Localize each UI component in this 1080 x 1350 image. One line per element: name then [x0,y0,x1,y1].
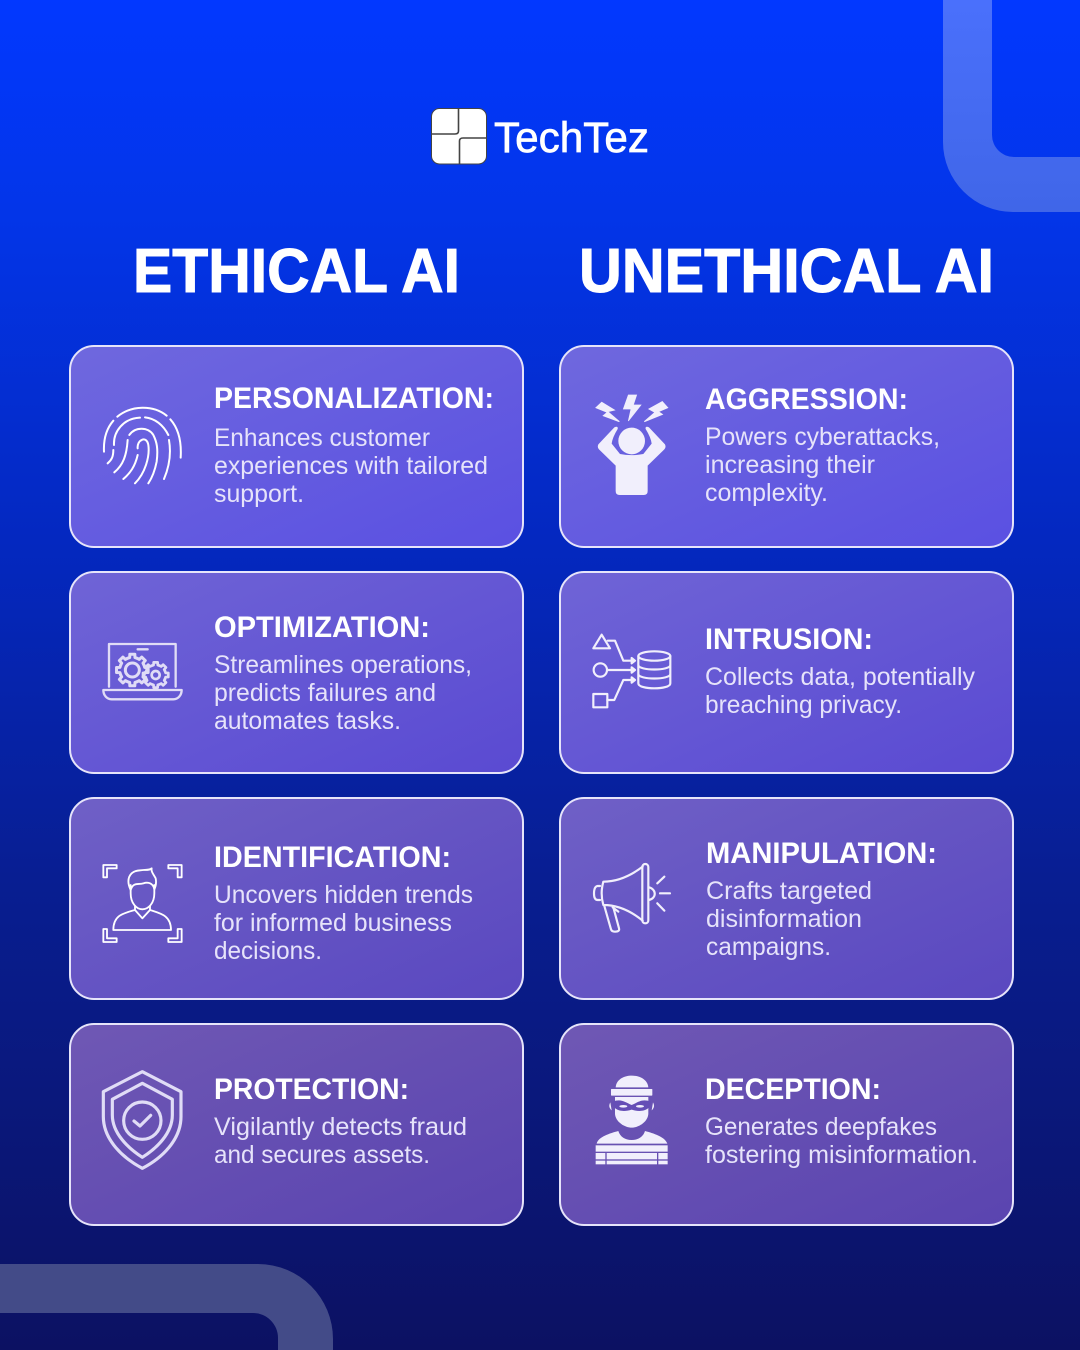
text: aggression: Powers cyberattacks, [705,423,940,451]
text: manipulation: Crafts targeted [706,877,872,905]
text: personalization: support. [214,480,304,508]
text: personalization: experiences with tailored [214,452,488,480]
panel: aggression [560,346,1013,547]
panel: personalization [70,346,523,547]
text: protection: Vigilantly detects fraud [214,1113,467,1141]
text: optimization: Streamlines operations, [214,651,472,679]
icon: face scan [103,865,182,942]
icon: laptop with gears [103,644,182,699]
text: manipulation: MANIPULATION: [706,837,937,870]
icon: data flowing into database [593,635,670,707]
icon: shield with check [103,1072,181,1168]
text: intrusion: breaching privacy. [705,691,902,719]
text: aggression [705,383,940,507]
logo wordmark: TechTez [494,114,649,162]
text: manipulation: campaigns. [706,933,831,961]
panel: deception [560,1024,1013,1225]
icon: stressed person with lightning [596,395,668,495]
text: identification: decisions. [214,937,322,965]
text: deception [705,1073,978,1169]
heading: unethical AI: UNETHICAL AI [579,237,994,306]
text: aggression: complexity. [705,479,828,507]
logo [431,108,649,164]
text: manipulation: disinformation [706,905,862,933]
text: deception: DECEPTION: [705,1073,881,1106]
text: personalization: Enhances customer [214,424,430,452]
text: personalization: PERSONALIZATION: [214,382,494,415]
text: intrusion: INTRUSION: [705,623,873,656]
text: optimization: OPTIMIZATION: [214,611,430,644]
panel: optimization [70,572,523,773]
text: identification: for informed business [214,909,452,937]
icon: masked thief [596,1076,668,1164]
panel: protection [70,1024,523,1225]
icon: fingerprint [104,408,181,483]
icon: megaphone [594,864,670,932]
text: aggression: increasing their [705,451,875,479]
decorative corner bracket: bottom left [0,1264,333,1350]
text: protection: and secures assets. [214,1141,430,1169]
text: protection: PROTECTION: [214,1073,409,1106]
text: optimization: predicts failures and [214,679,436,707]
text: deception: fostering misinformation. [705,1141,978,1169]
text: manipulation [706,837,937,961]
text: identification [214,841,473,965]
panel: identification [70,798,523,999]
text: personalization [214,382,494,508]
text: aggression: AGGRESSION: [705,383,908,416]
text: protection [214,1073,467,1169]
text: optimization [214,611,472,735]
text: optimization: automates tasks. [214,707,401,735]
heading: ethical AI: ETHICAL AI [133,237,460,306]
text: identification: IDENTIFICATION: [214,841,451,874]
logo mark [431,108,486,164]
panel: manipulation [560,798,1013,999]
text: intrusion: Collects data, potentially [705,663,975,691]
panel: intrusion [560,572,1013,773]
text: deception: Generates deepfakes [705,1113,937,1141]
text: intrusion [705,623,975,719]
text: identification: Uncovers hidden trends [214,881,473,909]
decorative corner bracket: top right [943,0,1080,212]
